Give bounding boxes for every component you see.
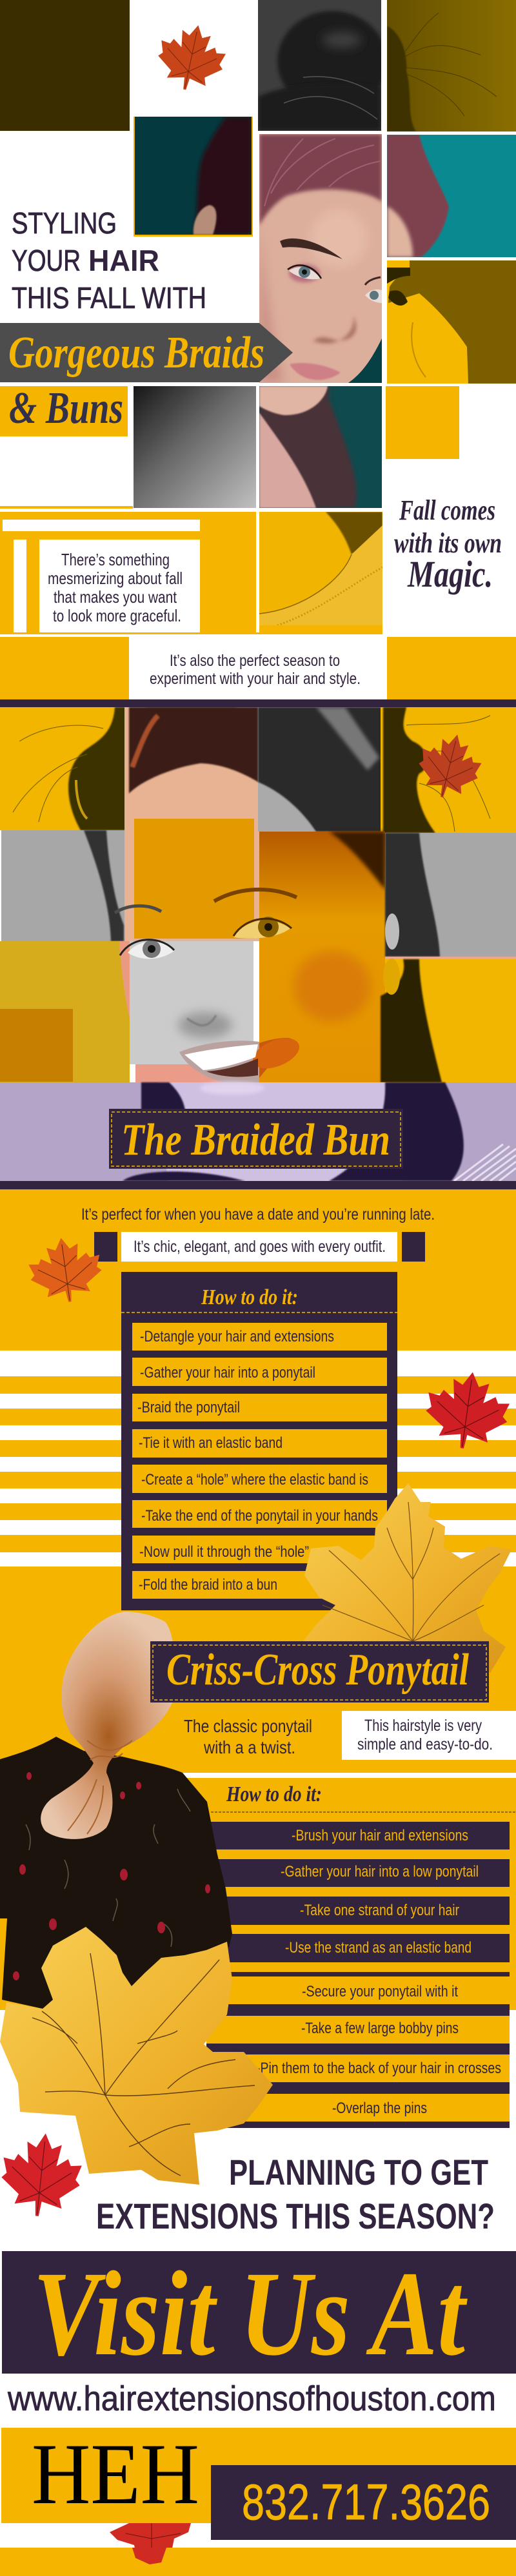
list step 7: -Now pull it through the “hole” [139,1543,309,1561]
icon: red maple leaf [421,1367,513,1454]
photo tile: neck [259,386,382,508]
yellow block right lower [381,957,516,1082]
list step 5 [132,1465,387,1493]
skin strip under face [135,1064,223,1082]
list step 8: -Overlap the pins [332,2100,427,2117]
orange square forehead [134,819,254,939]
yellow block left with hair bun [0,707,129,830]
title: THIS FALL WITH [12,281,206,315]
panel: footer yellow logo block: HEH [32,2426,199,2522]
list step 2: -Gather your hair into a ponytail [140,1364,315,1381]
callout: chic elegant: It’s chic, elegant, and goes with every outfit. [134,1238,386,1256]
list step 4 [132,1429,387,1458]
icon: large yellow leaf lower left [0,1927,273,2185]
text block: classic ponytail: with a a twist. [203,1737,295,1757]
coat [0,1737,232,2009]
list step 1 [132,1323,387,1351]
callout: simple and easy: This hairstyle is very [364,1717,482,1735]
banner: and buns: & Buns [9,384,123,433]
text block: intro: mesmerizing about fall [48,569,183,588]
panel: hero photo mosaic [0,0,516,508]
title [12,206,206,315]
text block: date line: It’s perfect for when you have a date and you’re running late. [81,1205,435,1224]
right edge white below panel [510,2010,516,2132]
mustard block left [0,941,130,1082]
lavender block [0,1082,516,1181]
panel: phone number [211,2465,516,2540]
icon: red leaf behind footer [110,2523,191,2564]
title: YOUR [12,244,81,277]
list step 6 [206,2016,510,2044]
skin base centre [124,707,259,941]
callout: chic elegant [94,1232,425,1262]
list step 3: -Braid the ponytail [137,1399,240,1416]
list step 5 [206,1976,510,2004]
blonde hair and ponytail [41,1612,176,1839]
icon: red maple leaf bottom left [0,2129,84,2220]
list step 8: -Fold the braid into a bun [139,1576,277,1594]
text block: intro: There’s something [61,550,170,569]
list step 5: -Create a “hole” where the elastic band is [141,1471,368,1488]
list step 4: -Tie it with an elastic band [139,1434,283,1452]
photo tile: olive wisps of hair [387,0,516,132]
grey block left [1,830,124,941]
yellow square [386,386,459,459]
banner: gorgeous braids: Gorgeous Braids [8,328,264,378]
icon: orange leaf [26,1233,105,1307]
panel: portrait colour-block photo [0,707,516,1181]
icon: red leaf tip over footer band [132,2548,166,2564]
callout: fall comes with its own magic [394,494,502,595]
text block: intro: to look more graceful. [53,606,181,625]
photo tile: yellow sweater [259,512,382,634]
panel: intro text [0,506,259,634]
black and white face block [130,941,253,1064]
list step 7 [132,1536,387,1563]
photo tile: yellow hand on olive [387,260,516,384]
divider bar [0,1181,516,1189]
photo tile: black and white hair bun [258,0,387,131]
grey block with hair [258,707,385,832]
title: HAIR [88,244,159,277]
list step 6: -Take the end of the ponytail in your hands [141,1507,378,1525]
white strip right [183,1773,516,1778]
icon: orange maple leaf [152,18,230,96]
panel: how to do it list, criss-cross [206,1822,510,2128]
list step 1 [211,1822,510,1849]
heading: planning to get extensions [96,2152,495,2236]
left eye [115,906,174,959]
list step 3 [132,1394,387,1421]
panel: braided bun background stripes [0,1189,516,2010]
heading: how to do it second: How to do it: [226,1782,322,1806]
list step 8 [206,2094,510,2122]
figure: woman from behind with blonde ponytail [0,1612,232,2009]
yellow block right with hair bun [381,707,516,833]
list step 8 [132,1571,387,1599]
list step 6 [132,1500,387,1528]
panel: perfect season text: experiment with your hair and style. [150,670,361,688]
icon: red maple leaf on portrait [412,727,487,805]
list step 3 [223,1897,510,1925]
list step 1: -Brush your hair and extensions [292,1827,468,1844]
callout: simple and easy [342,1711,516,1760]
divider bar [0,699,516,707]
callout: fall comes with its own magic: Magic. [407,553,493,595]
photo tile: bare shoulder black and white [134,386,256,508]
left edge white below panel [0,2010,206,2132]
callout: simple and easy: simple and easy-to-do. [357,1735,493,1753]
text block: classic ponytail [184,1716,312,1757]
list step 4: -Use the strand as an elastic band [285,1939,471,1956]
mouth and tongue [179,1038,299,1082]
dark olive square [0,0,130,131]
text block: intro [48,550,183,625]
title: STYLING [12,206,117,240]
orange block right face [259,832,385,1082]
list step 3: -Take one strand of your hair [300,1902,459,1919]
list step 1: -Detangle your hair and extensions [140,1328,334,1345]
panel: perfect season text [0,637,516,699]
text block: classic ponytail: The classic ponytail [184,1716,312,1736]
right eye [214,890,297,939]
icon: large yellow maple leaf [303,1483,511,1673]
text block: intro: that makes you want [54,587,177,607]
grey block right [385,833,516,957]
list step 4 [223,1934,510,1962]
list step 7 [206,2054,510,2082]
panel: footer yellow logo block [1,2426,516,2523]
photo tile: face centre [259,134,382,383]
heading: how to do it: How to do it: [201,1285,298,1309]
list step 2 [211,1859,510,1887]
heading: the braided bun: The Braided Bun [121,1115,390,1165]
panel: perfect season text: It’s also the perfect season to [170,652,340,670]
photo tile: dark teal with ear and hair [134,117,253,237]
list step 2 [132,1358,387,1386]
photo tile: teal with hair [387,135,516,257]
list step 6: -Take a few large bobby pins [301,2020,459,2037]
list step 5: -Secure your ponytail with it [302,1983,458,2000]
panel: how to do it list, braided bun [121,1272,397,1610]
footer band [0,2548,516,2576]
